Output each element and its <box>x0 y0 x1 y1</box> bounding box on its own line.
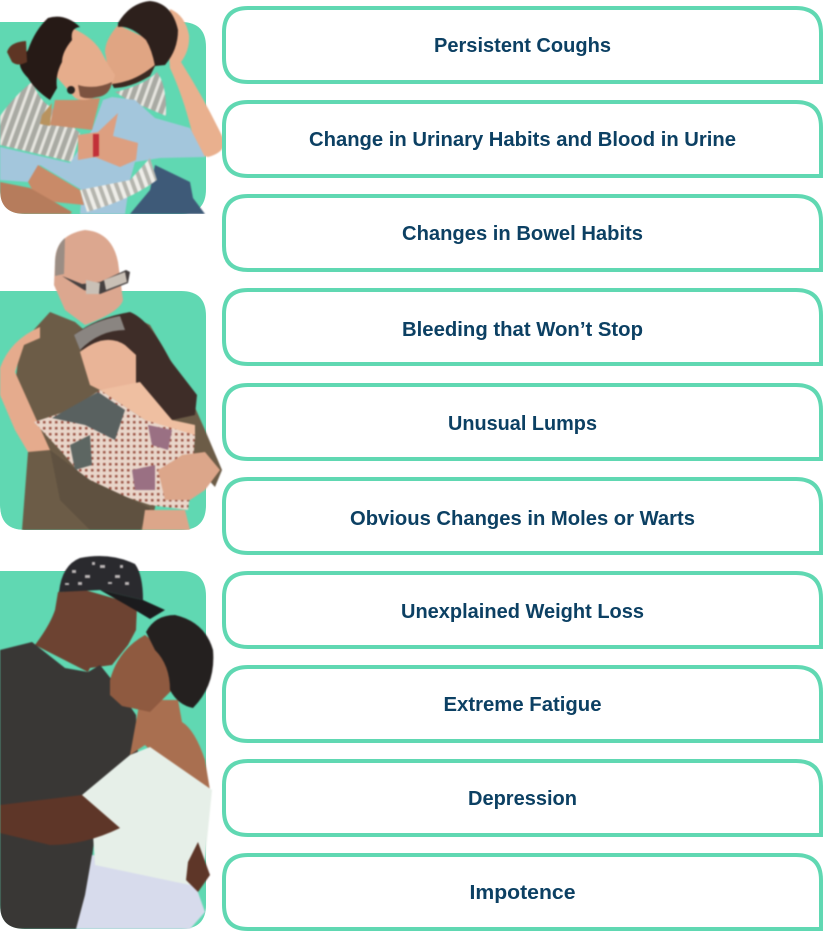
card: Depression: Depression <box>468 788 577 810</box>
card: Change in Urinary Habits and Blood in Urine: Change in Urinary Habits and Blood in Urine <box>309 129 736 151</box>
lower striped sleeve and hand <box>0 158 157 214</box>
hand on waist <box>186 842 210 892</box>
man arm around woman <box>0 795 120 845</box>
woman hair <box>74 312 197 420</box>
white top <box>82 747 212 885</box>
woman neck and shoulder <box>130 700 210 790</box>
card: Unusual Lumps: Unusual Lumps <box>448 413 597 435</box>
card: Changes in Bowel Habits: Changes in Bowel Habits <box>402 223 643 245</box>
black t-shirt <box>0 642 138 929</box>
panel: couple photo 3 <box>0 556 213 929</box>
card: Obvious Changes in Moles or Warts: Obvious Changes in Moles or Warts <box>350 508 695 530</box>
card: Impotence <box>224 855 821 929</box>
woman hair <box>146 615 213 708</box>
woman raised arm <box>0 327 50 452</box>
card: Extreme Fatigue: Extreme Fatigue <box>444 694 602 716</box>
card: Changes in Bowel Habits <box>224 196 821 270</box>
green backdrop 3 <box>0 571 206 929</box>
panel: couple photo 2 <box>0 230 222 530</box>
hand on shoulder and wrist band <box>78 113 138 167</box>
card: Extreme Fatigue <box>224 667 821 741</box>
card: Unusual Lumps <box>224 385 821 459</box>
green backdrop 1 <box>0 22 206 214</box>
card: Change in Urinary Habits and Blood in Urine <box>224 102 821 176</box>
man with raised arm: face and arm <box>105 1 224 157</box>
panel: couple photo 1 <box>0 1 224 214</box>
skirt <box>76 855 205 929</box>
denim shirt <box>0 97 205 214</box>
jeans <box>130 165 205 214</box>
man sleeve and hand <box>50 450 220 530</box>
man head and neck <box>35 590 137 672</box>
card: Persistent Coughs: Persistent Coughs <box>434 35 611 57</box>
olive shirt <box>15 312 222 530</box>
baseball cap <box>59 556 165 619</box>
woman face <box>110 635 172 712</box>
patterned dress <box>34 390 195 510</box>
green backdrop 2 <box>0 291 206 530</box>
card: Impotence: Impotence <box>470 882 576 904</box>
card: Bleeding that Won't Stop <box>224 290 821 364</box>
symptom cards <box>224 8 821 929</box>
man with curly hair: face and chest <box>7 17 115 130</box>
card: Unexplained Weight Loss <box>224 573 821 647</box>
card: Bleeding that Won't Stop: Bleeding that Won’t Stop <box>402 319 643 341</box>
man head with glasses <box>54 230 130 325</box>
card: Depression <box>224 761 821 835</box>
card: Unexplained Weight Loss: Unexplained Weight Loss <box>401 601 644 623</box>
striped sweater <box>0 72 166 162</box>
card: Persistent Coughs <box>224 8 821 82</box>
woman face and shoulder <box>80 340 195 440</box>
card: Obvious Changes in Moles or Warts <box>224 479 821 553</box>
